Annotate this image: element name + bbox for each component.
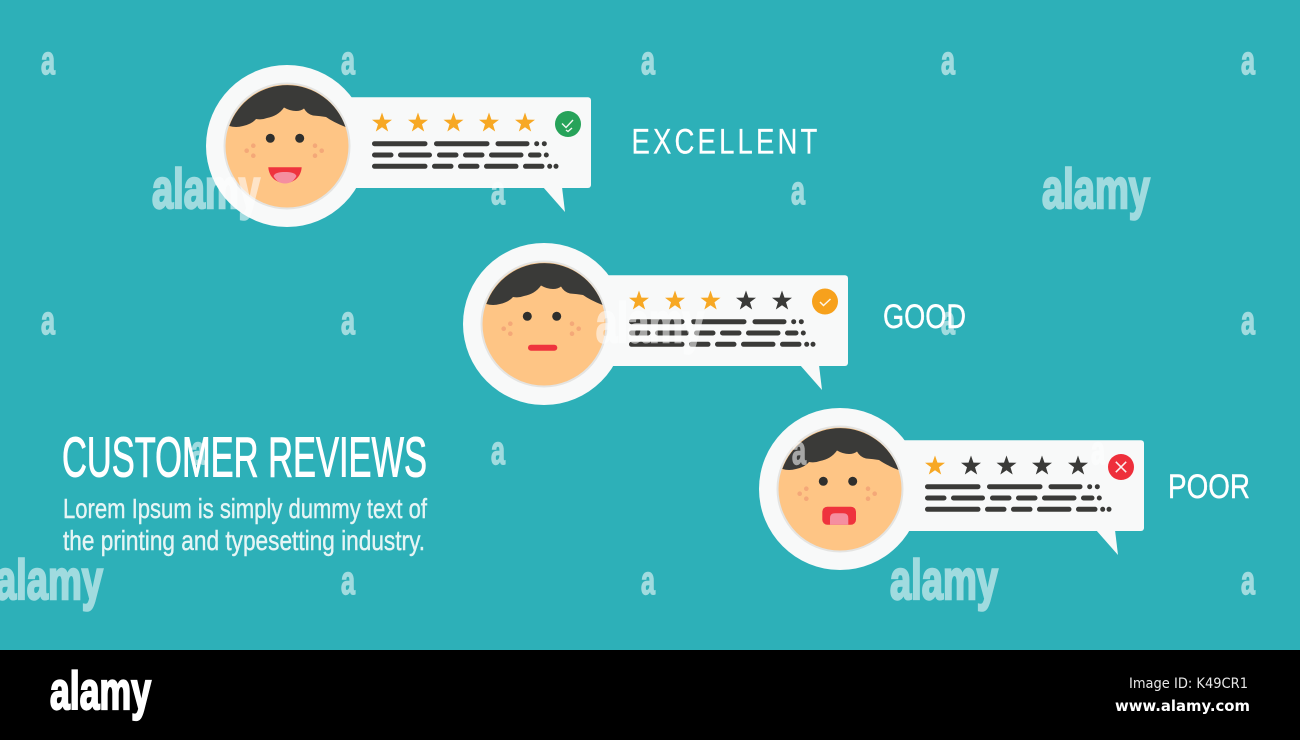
label: good: GOOD	[883, 298, 966, 336]
watermarks	[0, 39, 1255, 611]
watermarks: a	[41, 39, 55, 83]
image id: Image ID: K49CR1	[1129, 676, 1248, 692]
face: happy	[224, 82, 350, 210]
face: neutral	[480, 260, 608, 388]
watermarks: a	[1241, 299, 1255, 343]
watermarks: alamy	[152, 157, 260, 220]
watermarks: a	[491, 429, 505, 473]
face: unhappy	[776, 426, 904, 552]
watermarks: a	[1091, 429, 1105, 473]
watermarks: a	[491, 169, 505, 213]
label: poor: POOR	[1168, 468, 1250, 506]
stars: five gold	[372, 112, 535, 131]
watermarks: a	[791, 169, 805, 213]
text placeholder lines	[632, 322, 813, 344]
watermarks: a	[341, 299, 355, 343]
description text: Lorem Ipsum is simply dummy text of	[63, 493, 427, 524]
description text: the printing and typesetting industry.	[63, 525, 425, 556]
footer logo: alamy	[50, 662, 151, 721]
watermarks: a	[1241, 39, 1255, 83]
watermarks: a	[341, 559, 355, 603]
review card: excellent	[206, 65, 591, 227]
watermarks: a	[641, 559, 655, 603]
watermarks: alamy	[596, 291, 704, 354]
text placeholder lines	[374, 144, 556, 166]
icon: red cross badge	[1108, 454, 1134, 480]
stars: one gold, four dark	[925, 456, 1088, 474]
watermarks: a	[1241, 559, 1255, 603]
watermarks: a	[191, 429, 205, 473]
watermarks: a	[792, 429, 806, 473]
watermarks: a	[941, 299, 955, 343]
text placeholder lines	[928, 487, 1109, 509]
review card: good	[463, 243, 848, 405]
watermarks: alamy	[890, 548, 998, 611]
label: excellent: EXCELLENT	[632, 122, 820, 162]
website: www.alamy.com	[1115, 697, 1250, 715]
description text	[63, 493, 427, 556]
watermarks: a	[341, 39, 355, 83]
footer band	[0, 650, 1300, 740]
stars: three gold, two dark	[629, 290, 792, 309]
title: CUSTOMER REVIEWS	[62, 426, 427, 490]
watermarks: a	[41, 299, 55, 343]
icon: orange check badge	[812, 288, 838, 314]
review card: poor	[759, 408, 1144, 570]
watermarks: alamy	[1042, 157, 1150, 220]
watermarks: a	[641, 39, 655, 83]
icon: green check badge	[555, 111, 581, 137]
watermarks: a	[941, 39, 955, 83]
